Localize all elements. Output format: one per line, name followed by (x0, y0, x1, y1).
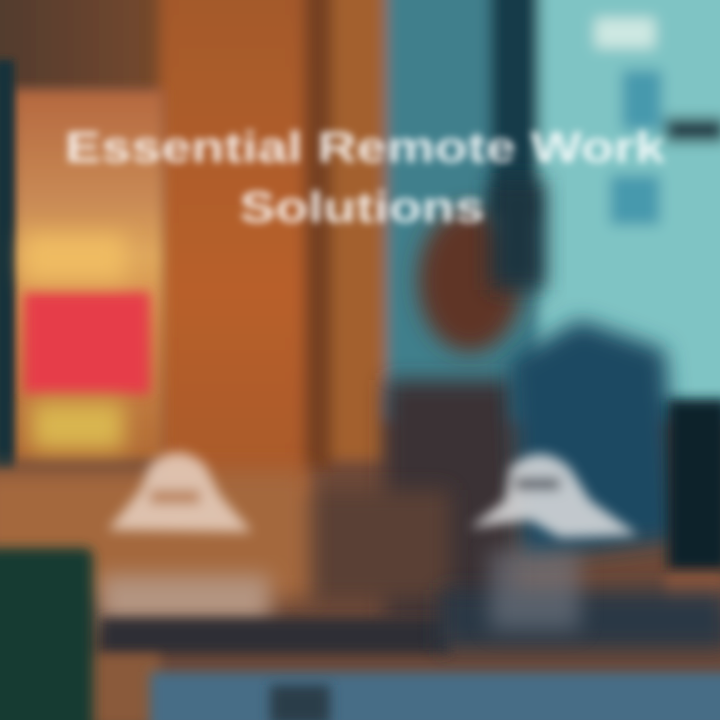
glowing lamp panel (0, 60, 164, 470)
icon: left cloud (108, 452, 252, 532)
stand below right cloud (490, 550, 580, 630)
title (65, 123, 666, 232)
icon: right cloud (470, 454, 638, 538)
title: Essential Remote Work (65, 123, 666, 172)
person silhouette (300, 180, 720, 620)
title: Solutions (240, 183, 484, 232)
desk and foreground (0, 470, 720, 720)
